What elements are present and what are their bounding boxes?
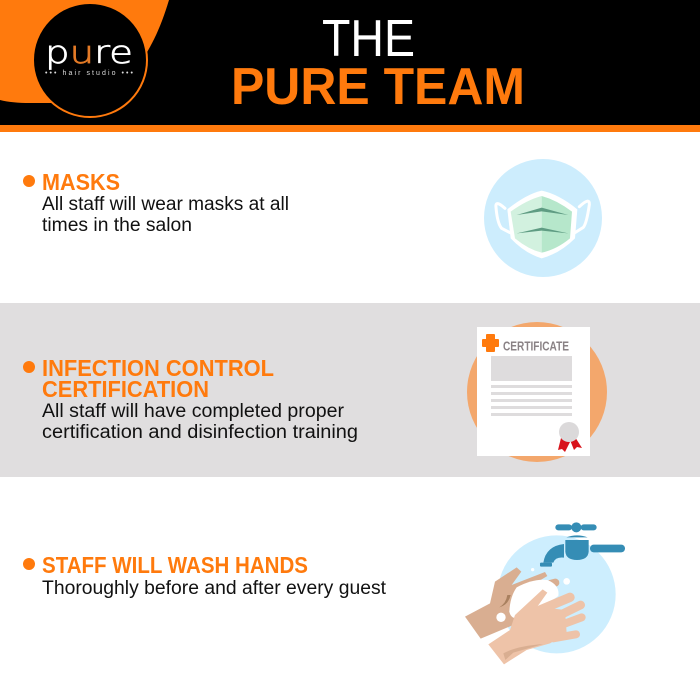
icon: washing hands under tap xyxy=(465,522,625,664)
panel: infection control text: CERTIFICATION xyxy=(42,376,209,402)
icon: certificate: CERTIFICATE xyxy=(503,340,569,354)
header band xyxy=(0,0,700,132)
panel: hand washing text xyxy=(23,552,387,599)
title xyxy=(231,10,525,116)
panel: masks text: MASKS xyxy=(42,169,120,195)
panel: infection control background xyxy=(0,303,700,477)
panel: infection control text: All staff will have completed proper xyxy=(42,401,345,422)
panel: masks text: All staff will wear masks at all xyxy=(42,194,289,215)
title: PURE TEAM xyxy=(231,58,525,116)
logo badge xyxy=(33,3,147,117)
panel: infection control text: INFECTION CONTROL xyxy=(42,355,274,381)
logo badge: pure xyxy=(45,35,133,71)
panel: infection control text: certification and disinfection training xyxy=(42,422,358,443)
panel: hand washing text: STAFF WILL WASH HANDS xyxy=(42,552,308,578)
title: THE xyxy=(322,10,415,68)
icon: certificate xyxy=(467,322,607,462)
panel: masks text: times in the salon xyxy=(42,215,192,236)
panel: infection control text xyxy=(23,355,358,443)
logo badge: ••• hair studio ••• xyxy=(45,70,134,77)
panel: masks text xyxy=(23,169,289,236)
panel: hand washing text: Thoroughly before and after every guest xyxy=(42,578,387,599)
icon: face mask xyxy=(484,159,602,277)
